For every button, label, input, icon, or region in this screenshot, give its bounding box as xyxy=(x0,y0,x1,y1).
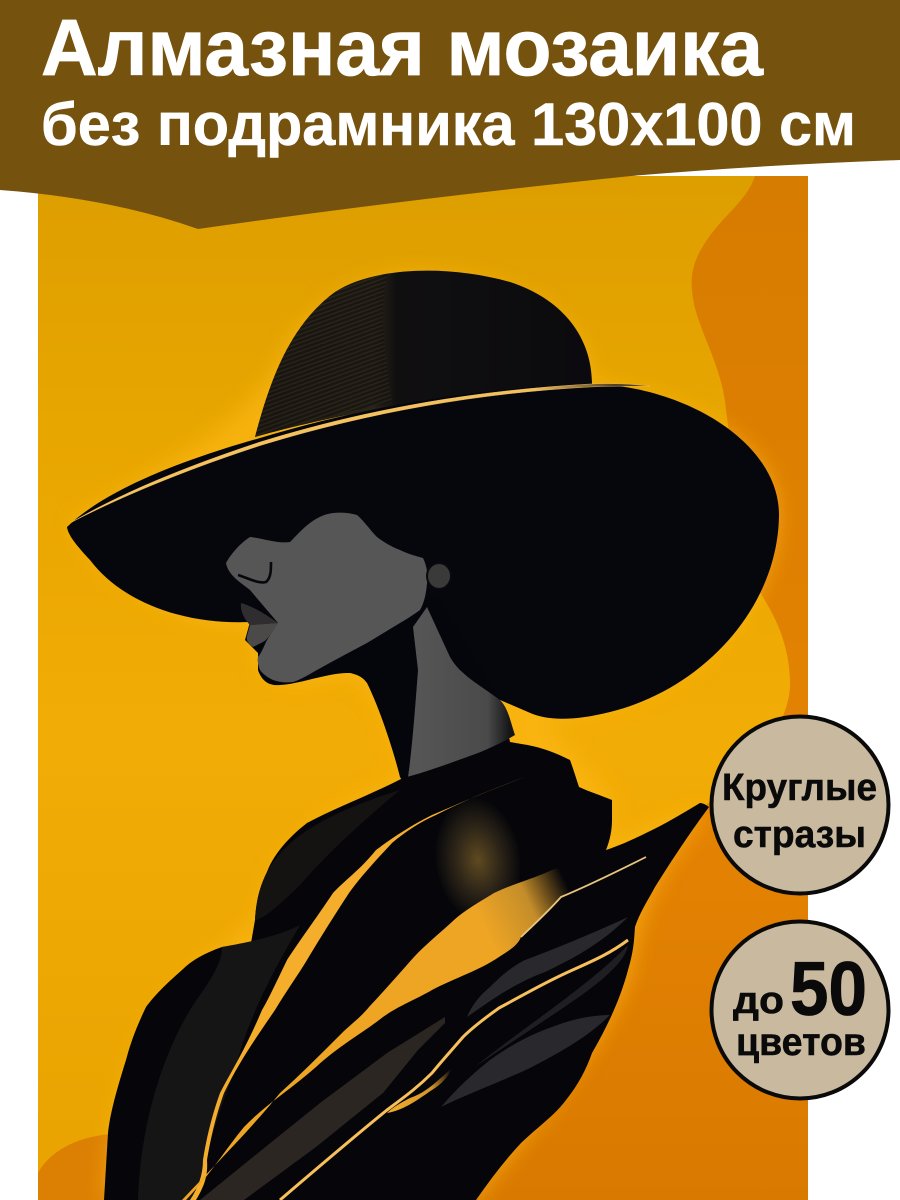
gold thin line upper xyxy=(521,857,646,937)
badge text line two: стразы xyxy=(733,814,866,856)
badge text: до: до xyxy=(733,980,784,1022)
gold thin line lower xyxy=(280,940,628,1200)
title line one: Алмазная мозаика xyxy=(41,3,763,92)
garment: left fold xyxy=(138,925,300,1200)
garment: upper shoulder fold xyxy=(255,790,400,920)
figure: neck and chin shadow xyxy=(245,605,510,779)
face: gray profile xyxy=(226,513,427,682)
neck: gray side xyxy=(408,607,515,777)
gold patch lower xyxy=(387,1068,452,1113)
garment: gray streak two xyxy=(441,1015,610,1107)
badge circle xyxy=(712,922,888,1098)
badge: round rhinestones xyxy=(712,716,888,894)
crown line texture xyxy=(255,274,392,437)
badge circle xyxy=(712,716,888,894)
badge number 50: 50 xyxy=(790,947,867,1032)
header banner xyxy=(0,0,900,229)
title line two: без подрамника 130х100 см xyxy=(41,91,856,158)
face: lower lip xyxy=(247,623,278,647)
banner shape xyxy=(0,0,900,229)
figure: hat brim xyxy=(67,384,779,719)
badge: up to 50 colours xyxy=(712,922,888,1098)
orange wave right side xyxy=(470,176,808,1200)
hat gold rim line xyxy=(72,384,650,522)
badge text line one: Круглые xyxy=(722,767,877,809)
glow around figure xyxy=(70,273,779,1200)
gold stripe left xyxy=(190,777,525,1200)
face: ear xyxy=(427,563,451,589)
garment: shoulder highlight xyxy=(438,802,518,912)
garment: gray streak three xyxy=(476,945,628,1066)
face: nostril xyxy=(238,562,271,582)
figure: hat crown xyxy=(255,271,592,437)
poster yellow background xyxy=(38,176,808,1200)
garment: brown textured strip xyxy=(200,1017,445,1200)
badge text: цветов: цветов xyxy=(736,1021,866,1064)
face: upper lip xyxy=(241,603,278,625)
poster artwork xyxy=(38,176,808,1200)
garment: gray streak one xyxy=(467,917,628,1017)
gold leaf large xyxy=(182,868,568,1200)
figure: garment body xyxy=(104,742,709,1200)
orange bump bottom left xyxy=(38,1134,108,1200)
